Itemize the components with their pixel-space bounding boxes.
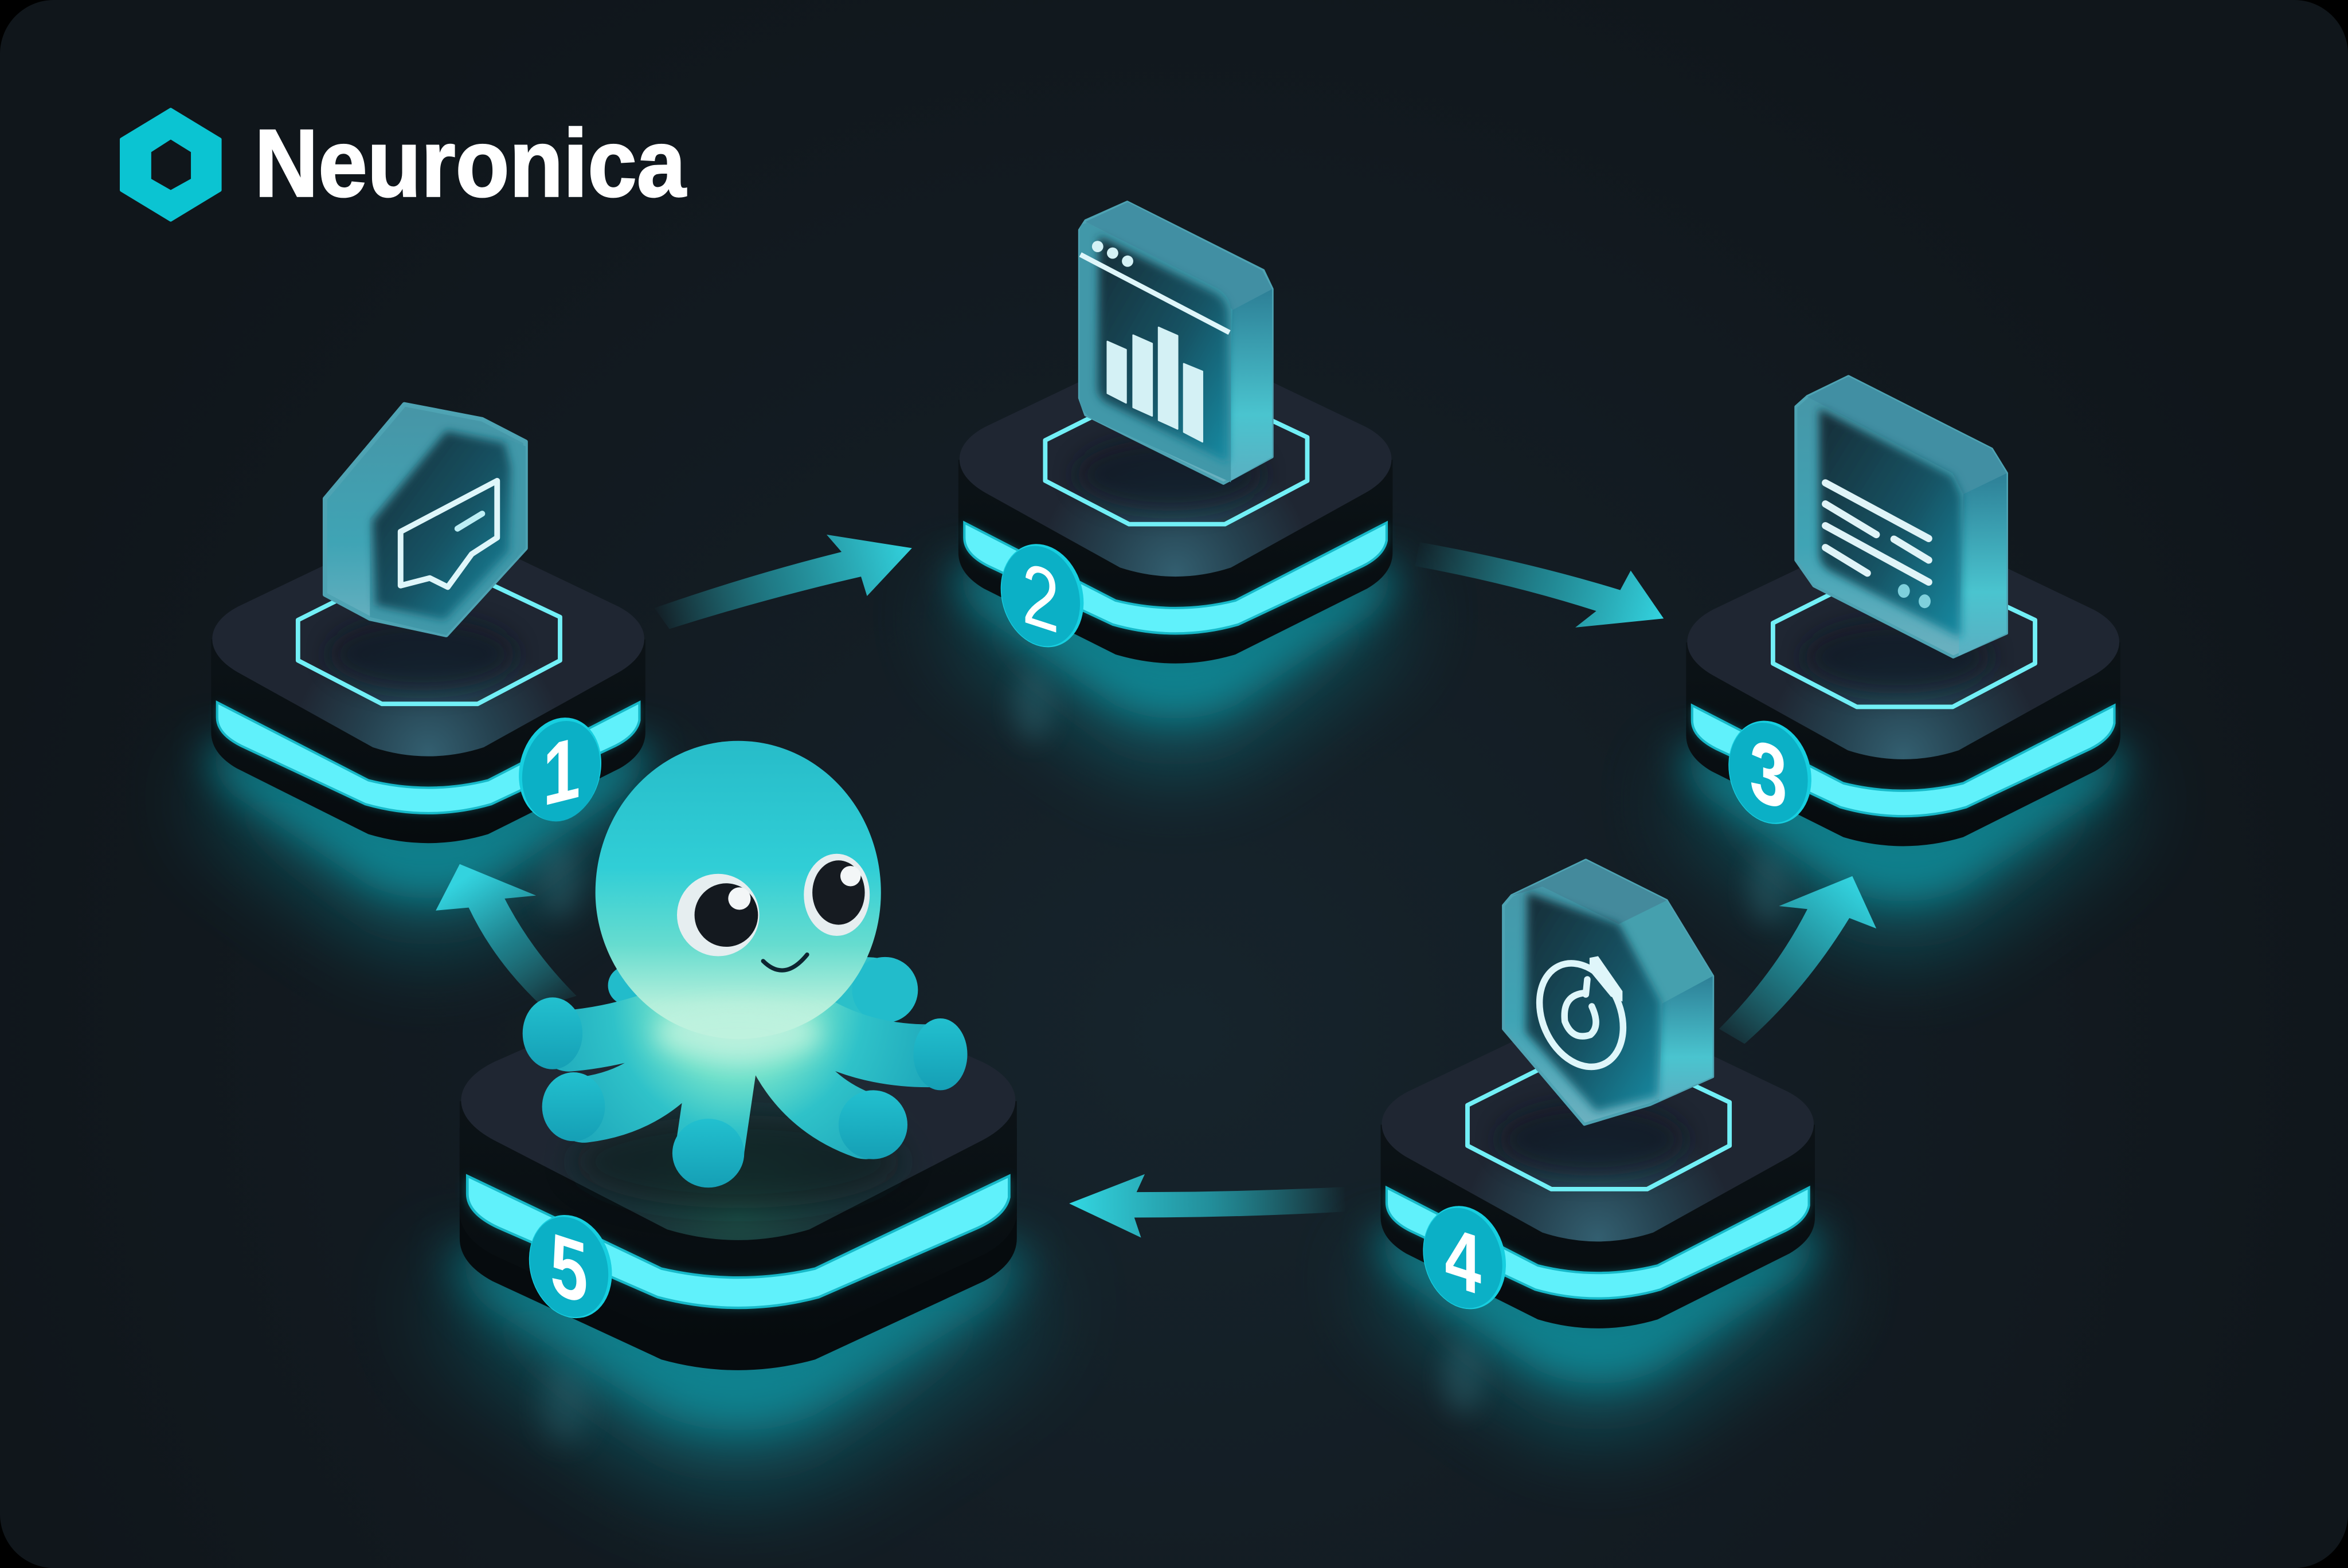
octopus smile bbox=[763, 955, 807, 970]
badge 3 bbox=[1717, 711, 1823, 834]
arrow: step 5 to step 1 bbox=[436, 864, 577, 1006]
glass block: chat bbox=[325, 405, 526, 635]
octopus left eye bbox=[677, 874, 760, 957]
arrow: step 2 to step 3 bbox=[1415, 542, 1664, 628]
icon: window header bbox=[1081, 241, 1230, 332]
icon: dial bbox=[1524, 950, 1639, 1080]
badge 5: 5 bbox=[550, 1214, 588, 1323]
octopus arm tips bbox=[523, 997, 968, 1187]
platform 1 bbox=[198, 530, 658, 947]
glass block: document bbox=[1796, 377, 2006, 657]
octopus back arms bbox=[608, 957, 918, 1023]
icon: document lines bbox=[1825, 483, 1929, 582]
octopus arms bbox=[569, 1016, 929, 1150]
glass block: target dial bbox=[1504, 860, 1713, 1124]
platform 2 bbox=[946, 350, 1406, 767]
logo bbox=[122, 109, 687, 220]
logo wordmark: Neuronica bbox=[255, 110, 687, 217]
octopus right eye bbox=[804, 854, 870, 936]
badge 2: 2 bbox=[1022, 544, 1059, 652]
octopus head bbox=[596, 741, 881, 1040]
octopus body glow bbox=[655, 1006, 822, 1060]
arrow: step 4 to step 5 bbox=[1069, 1174, 1345, 1238]
glass block: dashboard window bbox=[1079, 202, 1272, 483]
badge 4: 4 bbox=[1445, 1208, 1481, 1314]
badge 1: 1 bbox=[543, 719, 580, 825]
icon: bar chart bbox=[1108, 327, 1203, 442]
platform 4 bbox=[1368, 1016, 1827, 1432]
platform 5 bbox=[443, 971, 1033, 1485]
badge 2 bbox=[989, 534, 1095, 657]
arrow: step 4 to step 3 bbox=[1719, 876, 1876, 1044]
icon: chat bubble bbox=[401, 481, 497, 587]
octopus mascot bbox=[523, 741, 968, 1187]
platform 3 bbox=[1673, 533, 2133, 950]
badge 3: 3 bbox=[1750, 720, 1787, 829]
icon: document dots bbox=[1898, 584, 1931, 608]
badge 4 bbox=[1411, 1196, 1518, 1319]
logo hexagon icon bbox=[122, 109, 220, 220]
badge 5 bbox=[517, 1205, 624, 1328]
arrow: step 1 to step 2 bbox=[655, 535, 912, 629]
badge 1 bbox=[508, 709, 612, 830]
